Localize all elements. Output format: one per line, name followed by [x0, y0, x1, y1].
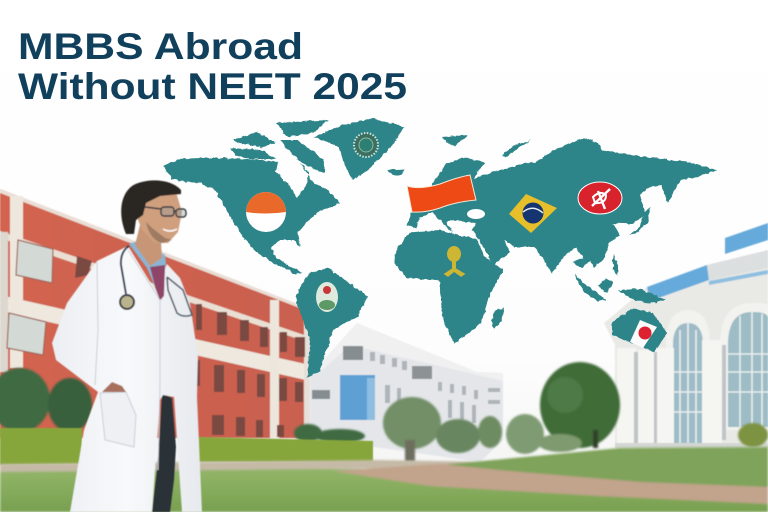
- Japan: [630, 207, 650, 235]
- neck: [135, 225, 162, 266]
- ear: [128, 205, 138, 221]
- trees: [0, 362, 768, 462]
- emblem: South America crest: [316, 282, 338, 312]
- emblem: yellow figure on Africa: [445, 246, 464, 276]
- hair: [121, 180, 181, 234]
- arched windows: [666, 310, 710, 443]
- Eurasia: [407, 138, 717, 273]
- Southeast Asia islands: [574, 254, 666, 304]
- trousers: [152, 393, 176, 512]
- world map: [163, 118, 717, 378]
- shirt collar: [129, 240, 166, 298]
- tie: [150, 265, 165, 300]
- UK: [388, 169, 405, 175]
- glass block windows: [7, 240, 53, 355]
- white coat: [52, 246, 202, 512]
- white and blue building: [310, 323, 503, 462]
- campus background: [0, 189, 768, 512]
- smile: [163, 229, 177, 231]
- Canadian Arctic islands: [276, 120, 328, 137]
- Madagascar: [491, 307, 504, 328]
- small windows: [75, 256, 305, 437]
- Black Sea: [467, 209, 485, 219]
- glasses: [145, 207, 186, 217]
- title: MBBS Abroad: [18, 26, 303, 67]
- stethoscope: [120, 246, 192, 316]
- flag: orange and white circle: [246, 192, 286, 232]
- title: [18, 26, 407, 107]
- doctor figure: [52, 180, 202, 512]
- title: Without NEET 2025: [18, 66, 407, 107]
- flag: Australia label: [630, 320, 657, 348]
- South America: [295, 268, 368, 378]
- Africa: [394, 230, 503, 344]
- beard: [146, 222, 172, 243]
- flag: red circle emblem: [578, 182, 622, 214]
- hand in pocket: [102, 382, 126, 392]
- columns: [617, 340, 722, 447]
- flag: Brazil diamond: [509, 194, 557, 233]
- coat folds: [95, 250, 165, 470]
- Greenland: [313, 118, 404, 180]
- right white columned building: [604, 223, 768, 448]
- North America: [163, 158, 340, 274]
- emblem: Greenland seal: [354, 133, 378, 157]
- Novaya Zemlya: [501, 140, 531, 157]
- Australia: [612, 308, 667, 352]
- flag: red banner: [407, 175, 476, 212]
- Iceland: [442, 135, 468, 146]
- red brick building: [0, 189, 310, 438]
- face: [135, 192, 182, 243]
- hedges: [0, 428, 373, 465]
- grass and paths: [0, 447, 768, 512]
